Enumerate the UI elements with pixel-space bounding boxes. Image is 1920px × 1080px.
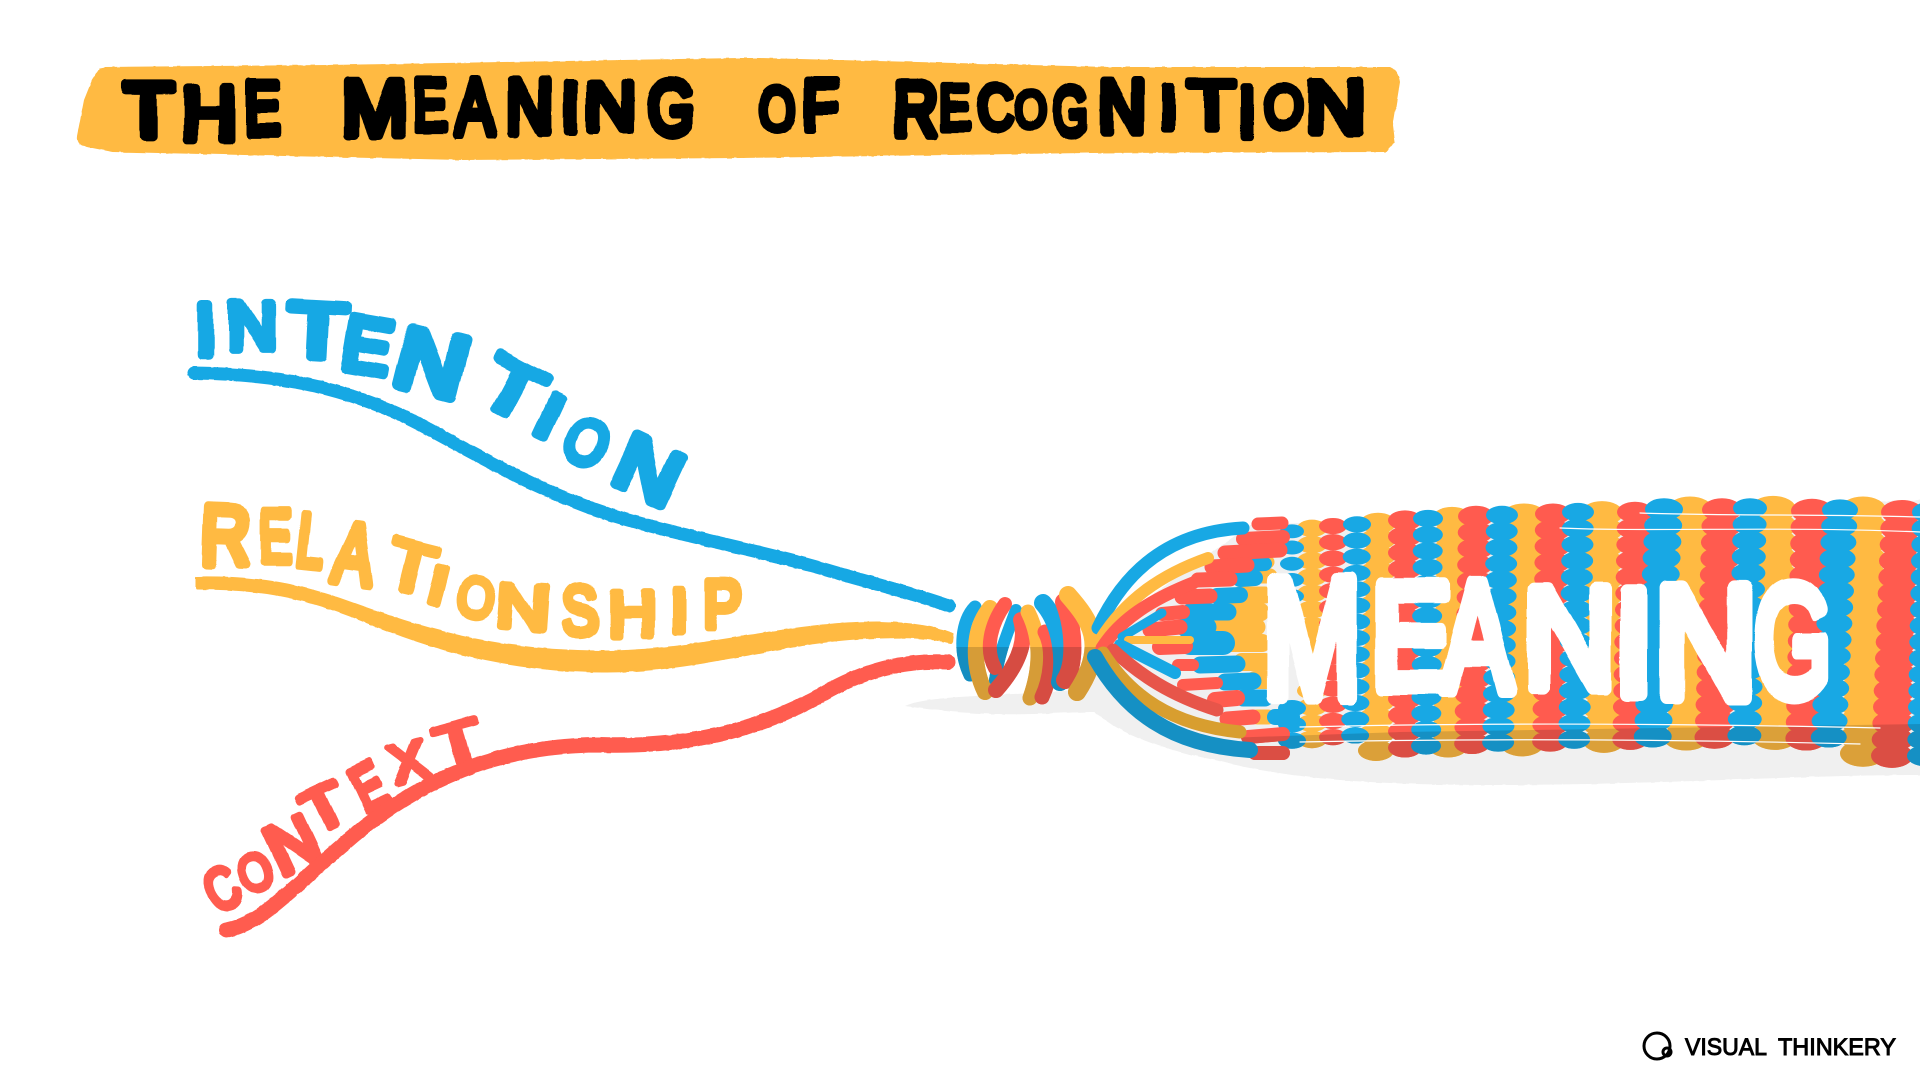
title: The Meaning of Recognition: N [506,64,553,149]
label: meaning (white on the band): N [1655,553,1757,731]
label: relationship: O [455,565,497,632]
woven band of coloured stitches [1150,508,1920,757]
label: meaning (white on the band): N [1523,559,1617,719]
label: intention: O [555,404,619,482]
icon: Visual Thinkery logo [1644,1033,1671,1059]
label: relationship: I [670,578,688,646]
title: The Meaning of Recognition: T [1188,65,1235,144]
label: intention: I [525,380,574,453]
ground shadow under the woven band [905,500,1920,785]
label: relationship: R [200,489,252,583]
label: relationship: N [494,569,552,644]
label: intention [196,286,696,524]
title: The Meaning of Recognition: E [939,71,970,143]
title: The Meaning of Recognition: C [977,73,1013,144]
label: context: X [384,728,435,795]
label: intention: N [227,287,277,364]
title: The Meaning of Recognition: T [123,68,174,153]
label: context: C [192,852,254,926]
title: The Meaning of Recognition: I [1159,72,1177,144]
label: relationship: A [328,506,380,604]
title: The Meaning of Recognition: H [181,72,237,156]
thread: intention (blue) [194,373,949,606]
knot binding the three threads [963,595,1094,698]
label: meaning (white on the band): E [1372,552,1452,720]
banner background [77,58,1400,160]
title: The Meaning of Recognition: G [1053,71,1089,151]
title: The Meaning of Recognition: G [648,64,694,151]
gaps between the outer rows [1300,513,1920,744]
title: The Meaning of Recognition: F [802,67,840,145]
label: intention: N [387,309,476,418]
label: intention: E [336,299,399,392]
label: relationship: S [560,571,600,652]
title: The Meaning of Recognition: O [1014,81,1047,137]
label: context: T [291,768,358,847]
label: relationship: I [421,554,455,619]
title: The Meaning of Recognition: N [1098,65,1146,148]
title: The Meaning of Recognition: E [413,65,448,146]
label: relationship: L [293,499,329,584]
title: The Meaning of Recognition: R [893,66,938,152]
label: context: O [231,840,282,907]
label: intention: N [601,418,697,524]
label: relationship: E [259,496,293,578]
title banner [77,58,1400,160]
label: relationship [200,489,742,652]
label: intention: T [287,286,349,375]
label: context [192,707,489,926]
title: The Meaning of Recognition: O [1264,74,1302,142]
label: meaning (white on the band): G [1754,552,1832,728]
label: meaning (white on the band): I [1615,558,1653,726]
label: context: E [340,748,397,825]
label: meaning (white on the band): M [1263,544,1361,732]
threads fanning out of the knot into the band [1095,528,1250,750]
title: The Meaning of Recognition: A [456,62,495,152]
darker bottom rows of the band [1241,724,1920,768]
title: The Meaning of Recognition: I [561,68,580,146]
left-hand tapering stitches [1150,523,1292,753]
title: The Meaning of Recognition: I [1238,71,1256,153]
thread: context (red) [226,662,948,930]
credit: Visual Thinkery [1644,1033,1896,1061]
credit text: VISUAL [1685,1034,1767,1061]
title: The Meaning of Recognition: M [342,65,407,152]
label: context: T [428,707,489,779]
thread: relationship (yellow) [197,578,952,671]
credit: Visual Thinkery: THINKERY [1778,1034,1896,1061]
title: The Meaning of Recognition: N [585,67,636,145]
title: The Meaning of Recognition: E [244,66,281,151]
title: The Meaning of Recognition [123,62,1366,156]
title: The Meaning of Recognition: N [1305,65,1366,148]
label: relationship: P [702,566,742,643]
title: The Meaning of Recognition: O [759,76,795,143]
label: intention: T [468,339,557,439]
label: intention: I [196,291,216,373]
label: relationship: T [379,523,444,611]
label: meaning (white on the band): A [1442,549,1512,725]
label: meaning (white on the band) [1263,544,1832,732]
label: relationship: H [608,578,656,650]
label: context: N [254,800,331,891]
